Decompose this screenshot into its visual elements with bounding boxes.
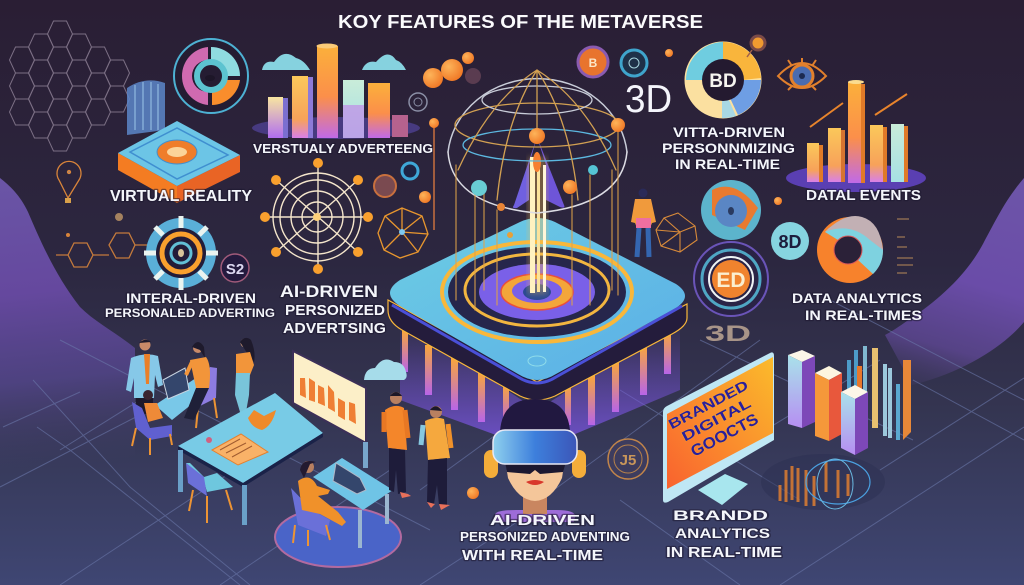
main desk and monitor xyxy=(178,351,368,525)
label: versatility advertising: VERSTUALY ADVERTEENG xyxy=(253,142,433,156)
label: vitta-driven personalizing in real-time: VITTA-DRIVEN xyxy=(673,124,785,140)
icon: segmented donut xyxy=(174,39,248,113)
label: vitta-driven personalizing in real-time: PERSONNMIZING xyxy=(662,140,795,156)
icon: data analytics donut xyxy=(817,216,883,283)
label: branded analytics in real-time: IN REAL-TIME xyxy=(666,545,782,561)
small orange sphere xyxy=(774,197,782,205)
label: vitta-driven personalizing in real-time: IN REAL-TIME xyxy=(675,156,780,172)
badge: 8D: 8D xyxy=(778,232,802,252)
purple wave left xyxy=(0,178,135,470)
monitor: branded digital goods: BRANDED xyxy=(666,377,751,432)
label: AI-driven personalized advertising: ADVERTSING xyxy=(283,320,386,337)
icon: polyhedron left xyxy=(378,208,428,258)
label: data analytics in real-times: IN REAL-TIMES xyxy=(805,307,922,323)
badge: 8D xyxy=(771,222,809,260)
icon: light bulb xyxy=(57,161,81,203)
icon: virtual reality tile xyxy=(118,80,240,203)
icon: hexagon pair xyxy=(56,213,148,267)
label: branded analytics in real-time: BRANDD xyxy=(673,508,768,523)
title: KOY FEATURES OF THE METAVERSE xyxy=(338,12,703,32)
floor grid xyxy=(0,300,1024,585)
icon: BD donut xyxy=(686,42,761,118)
seated worker desk xyxy=(275,458,401,567)
central platform columns xyxy=(400,320,680,450)
label: AI-driven personalized advertising with real-time: AI-DRIVEN xyxy=(490,512,595,529)
label: 3D lower: 3D xyxy=(705,321,751,346)
decorative spheres xyxy=(423,52,481,88)
VR headset head xyxy=(484,399,586,522)
icon: ED stacked circle: ED xyxy=(716,269,746,292)
3D bar chart: analytics xyxy=(788,346,911,455)
coin icon: J5 xyxy=(620,452,636,469)
wireframe dome xyxy=(448,70,627,310)
standing people xyxy=(384,392,451,510)
label: vitta-driven personalizing in real-time xyxy=(662,124,795,172)
bar chart: advertising xyxy=(252,44,420,139)
badge icons top xyxy=(578,47,673,77)
icon: eye xyxy=(778,58,826,90)
label: internal-driven personalized advertising: INTERAL-DRIVEN xyxy=(126,290,256,306)
central platform xyxy=(388,218,687,400)
monitor: branded digital goods: GOOCTS xyxy=(688,411,762,461)
label: branded analytics in real-time xyxy=(666,508,782,561)
label: AI-driven personalized advertising: PERSONIZED xyxy=(285,302,385,319)
badge: S2: S2 xyxy=(226,261,244,278)
hexagon network xyxy=(10,21,130,151)
meeting trio xyxy=(126,338,255,455)
label: virtual reality: VIRTUAL REALITY xyxy=(110,188,253,205)
icon: blue orange disc xyxy=(701,180,761,240)
label: data events: DATAL EVENTS xyxy=(806,188,921,204)
badge: S2 xyxy=(221,254,249,282)
coin icon xyxy=(608,439,648,479)
label: AI-driven personalized advertising with real-time: WITH REAL-TIME xyxy=(462,547,603,564)
small icons beside web xyxy=(374,93,439,230)
small sphere xyxy=(467,487,479,499)
icon: target wheel xyxy=(144,216,218,290)
label: internal-driven personalized advertising: PERSONALED ADVERTING xyxy=(105,308,275,320)
cloud xyxy=(364,360,407,380)
legend marks right xyxy=(897,219,913,273)
icon: polyhedron right xyxy=(656,213,697,252)
icon: small target xyxy=(747,36,765,57)
label: AI-driven personalized advertising with real-time xyxy=(460,512,630,564)
label: AI-driven personalized advertising: AI-DRIVEN xyxy=(280,282,378,301)
label: internal-driven personalized advertising xyxy=(105,290,275,320)
label: AI-driven personalized advertising with real-time: PERSONIZED ADVENTING xyxy=(460,529,630,544)
icon: ED stacked circle xyxy=(694,242,768,316)
glowing beam and arrow xyxy=(513,137,564,294)
icon: BD donut: BD xyxy=(709,71,737,92)
label: 3D: 3D xyxy=(625,78,672,121)
bar chart: data events xyxy=(786,80,926,192)
icon: web network xyxy=(260,158,373,274)
monitor: branded digital goods xyxy=(663,352,774,505)
label: branded analytics in real-time: ANALYTICS xyxy=(675,525,770,541)
monitor: branded digital goods: DIGITAL xyxy=(679,394,754,444)
swirling analytics blob xyxy=(761,454,885,510)
label: data analytics in real-times: DATA ANALYTICS xyxy=(792,290,922,306)
badge icons top: B xyxy=(589,56,598,70)
purple wave right xyxy=(885,178,1024,385)
label: AI-driven personalized advertising xyxy=(280,282,386,337)
label: data analytics in real-times xyxy=(792,290,922,323)
person standing xyxy=(631,188,656,257)
